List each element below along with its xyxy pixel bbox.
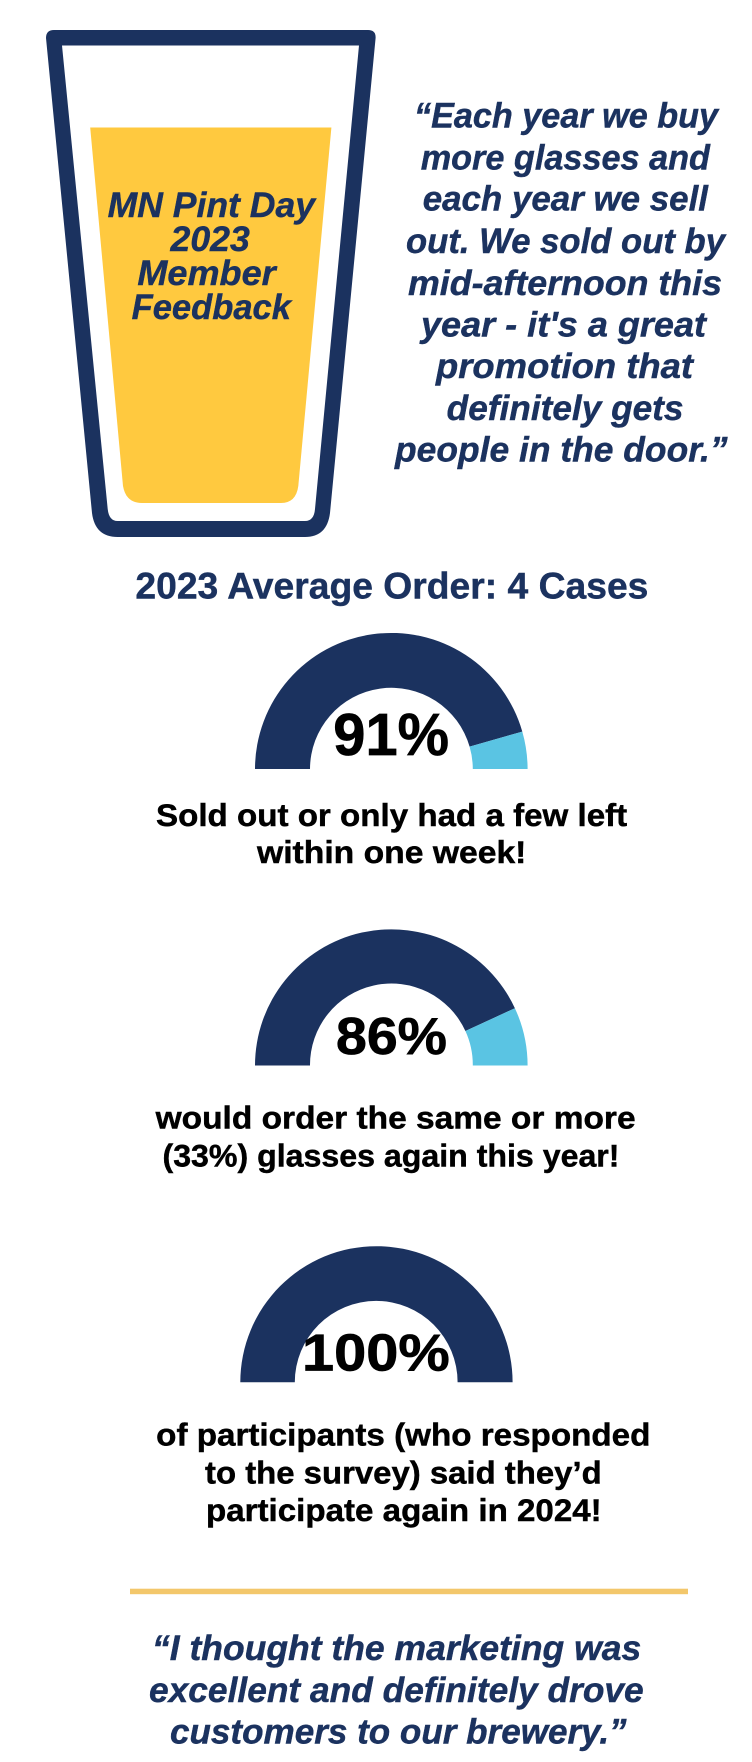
caption: would order again: would order the same or more xyxy=(155,1100,636,1136)
caption: sold out: within one week! xyxy=(256,834,526,870)
caption: participants xyxy=(156,1416,650,1528)
title xyxy=(108,186,317,327)
caption: participants: of participants (who responded xyxy=(156,1416,650,1452)
heading: average order: 2023 Average Order: 4 Cases xyxy=(135,566,648,606)
gauge: 86 percent xyxy=(255,929,528,1066)
title: 2023 xyxy=(169,220,250,259)
quote: each year we buy more glasses: year - it's a great xyxy=(419,305,707,344)
gauge: 91 percent xyxy=(255,633,528,769)
caption: participants: to the survey) said they’d xyxy=(205,1455,602,1491)
caption: would order again: (33%) glasses again this year! xyxy=(162,1137,620,1173)
quote: each year we buy more glasses: people in the door.” xyxy=(394,430,728,469)
quote: marketing was excellent xyxy=(149,1629,644,1751)
quote: marketing was excellent: “I thought the marketing was xyxy=(152,1629,641,1668)
caption: sold out: Sold out or only had a few left xyxy=(156,797,628,833)
quote: each year we buy more glasses xyxy=(394,97,728,469)
quote: each year we buy more glasses: mid-afternoon this xyxy=(408,264,722,303)
quote: each year we buy more glasses: out. We sold out by xyxy=(406,222,727,261)
glass outline xyxy=(46,30,376,537)
gauge: 100 percent xyxy=(240,1246,513,1382)
quote: each year we buy more glasses: definitely gets xyxy=(447,389,684,428)
quote: each year we buy more glasses: “Each year we buy xyxy=(414,97,719,136)
quote: marketing was excellent: excellent and definitely drove xyxy=(149,1671,644,1710)
caption: participants: participate again in 2024! xyxy=(206,1492,602,1528)
quote: marketing was excellent: customers to our brewery.” xyxy=(170,1712,627,1751)
quote: each year we buy more glasses: more glasses and xyxy=(421,138,711,177)
title: Member xyxy=(137,254,278,293)
caption: sold out xyxy=(156,797,628,870)
beer fill xyxy=(90,128,331,503)
gauge: 86 percent: 86% xyxy=(336,1008,447,1066)
title: Feedback xyxy=(132,288,293,327)
icon: pint glass with title xyxy=(46,30,376,537)
quote: each year we buy more glasses: each year we sell xyxy=(423,180,709,219)
gauge: 91 percent: 91% xyxy=(333,702,449,768)
quote: each year we buy more glasses: promotion that xyxy=(435,347,694,386)
caption: would order again xyxy=(155,1100,636,1173)
title: MN Pint Day xyxy=(108,186,317,225)
gauge: 100 percent: 100% xyxy=(302,1324,450,1382)
